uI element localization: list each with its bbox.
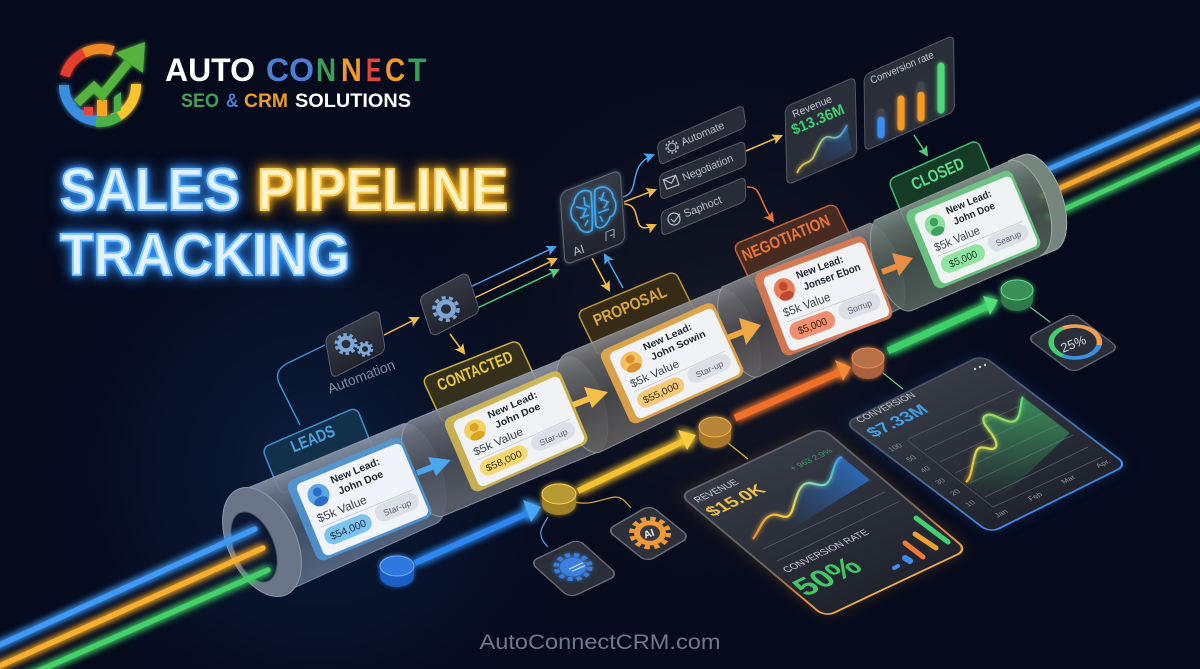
- arrow: negotiation pill to revenue: [746, 136, 781, 151]
- icon: check: [668, 213, 680, 225]
- pill: negotiation: [659, 141, 746, 200]
- value: $5k Value: [781, 290, 833, 320]
- grid lines: [907, 390, 1102, 507]
- name: Jonser Ebon: [802, 262, 862, 293]
- node: yellow: [542, 484, 576, 515]
- pill: amount: $5,000: [948, 249, 980, 271]
- flow bar: blue: [415, 500, 541, 563]
- pill: tag: Searup: [994, 229, 1023, 248]
- arrow: gear to contacted: [450, 334, 464, 353]
- logo: [64, 42, 427, 122]
- pill: amount: $58,000: [485, 449, 524, 474]
- name: New Lead:: [795, 254, 845, 282]
- logo wordmark: E: [366, 52, 381, 88]
- arrow: conversion rate to closed: [914, 135, 927, 155]
- revenue chart: [753, 457, 900, 561]
- name: John Doe: [494, 402, 543, 431]
- label: revenue: REVENUE: [691, 478, 742, 505]
- tube opening: [207, 475, 317, 609]
- label: conversion rate: Conversion rate: [868, 49, 936, 87]
- label: conversion rate: CONVERSION RATE: [780, 528, 872, 575]
- name: John Doe: [952, 200, 997, 228]
- label: revenue: Revenue: [790, 93, 834, 121]
- stage label: leads: LEADS: [288, 421, 338, 456]
- label: saphoct: Saphoct: [682, 194, 724, 220]
- label: negotiation: Negotiation: [681, 153, 735, 184]
- arrow: contacted to proposal: [573, 387, 608, 408]
- conversion chart: [966, 397, 1070, 507]
- label: 25%: 25%: [1058, 332, 1089, 356]
- pill: tag: [685, 351, 734, 386]
- node: green: [1001, 280, 1033, 311]
- arrows: AI to action pills: [623, 155, 655, 228]
- logo wordmark: N: [316, 53, 336, 88]
- pipeline tube: leads: [207, 423, 446, 609]
- avatar: [461, 416, 490, 444]
- mini card: revenue: [785, 77, 857, 185]
- axis labels: Mar: [1059, 474, 1078, 485]
- tube end bevel: [1008, 154, 1067, 256]
- value: conversion: $7.33M: [862, 401, 933, 441]
- value: revenue: $13.36M: [789, 101, 847, 139]
- pipeline tube: proposal: [556, 289, 760, 453]
- title: SALES: [60, 157, 240, 223]
- axis labels: Jan: [992, 508, 1010, 519]
- value: revenue: $15.0K: [701, 481, 770, 520]
- avatar: [304, 481, 333, 510]
- tile: AI brain: [560, 170, 625, 265]
- pipeline tube: contacted: [401, 357, 608, 516]
- name: New Lead:: [944, 188, 993, 217]
- tile: AI gear: [607, 505, 690, 562]
- title: PIPELINE: [257, 157, 508, 223]
- pill: tag: [836, 290, 883, 322]
- arrows: AI and proposal: [592, 255, 623, 290]
- stage label: negotiation: NEGOTIATION: [739, 212, 833, 265]
- icon: burst gear: [556, 555, 590, 579]
- axis labels: 100: [886, 442, 904, 453]
- value: $5k Value: [315, 493, 369, 525]
- axis labels: 20: [948, 488, 962, 497]
- axis labels: Apr.: [1093, 458, 1113, 469]
- axis labels: 40: [918, 465, 932, 474]
- arrow: negotiation to closed: [882, 253, 913, 276]
- stage label: negotiation: [733, 203, 856, 290]
- label: conversion: CONVERSION: [854, 391, 919, 425]
- node: amber: [699, 417, 731, 448]
- title: [60, 157, 508, 288]
- label: change: + 963 2.9%: [787, 447, 835, 472]
- tile: automation: [325, 310, 397, 396]
- pill: amount: [634, 375, 687, 410]
- logo tagline: [181, 90, 411, 112]
- pill: amount: [477, 443, 530, 478]
- arrow: automation to gear: [384, 318, 418, 335]
- name: John Doe: [337, 469, 385, 497]
- logo tagline: &: [226, 90, 238, 111]
- label: automate: Automate: [679, 120, 726, 149]
- value: $5k Value: [629, 358, 681, 391]
- icon: brain: [571, 187, 616, 232]
- flow bar: yellow: [578, 430, 696, 491]
- dashboard: conversion: [845, 355, 1127, 533]
- label: AI: AI: [571, 242, 586, 259]
- logo wordmark: N: [341, 53, 362, 88]
- donut chart: [1051, 326, 1099, 358]
- stage label: closed: CLOSED: [908, 154, 967, 194]
- pill: tag: Star-up: [538, 427, 569, 448]
- pill: amount: $5,000: [797, 316, 829, 337]
- name: [329, 457, 387, 499]
- name: New Lead:: [329, 457, 382, 487]
- pill: automate: [657, 105, 746, 165]
- arrow: proposal to negotiation: [727, 318, 761, 345]
- icon: AI gear: [632, 519, 668, 547]
- lower flow connectors: [541, 307, 1050, 547]
- lead card: negotiation: [753, 234, 895, 357]
- lead card: leads: [285, 435, 434, 563]
- name: [486, 390, 544, 432]
- stage label: contacted: [422, 340, 539, 424]
- incoming data lines right: [1035, 101, 1200, 218]
- axis labels: 30: [933, 477, 947, 486]
- name: [795, 250, 862, 294]
- pipeline tube: closed: [870, 154, 1067, 311]
- tube hole: [222, 505, 286, 589]
- incoming data lines left: [0, 529, 268, 669]
- tile: blue gear burst: [530, 539, 618, 598]
- name: New Lead:: [642, 322, 694, 353]
- logo wordmark: AUTO: [165, 52, 255, 88]
- menu dots: [974, 364, 986, 370]
- name: New Lead:: [486, 390, 539, 421]
- stage label: closed: [888, 140, 996, 226]
- stage label: proposal: [577, 271, 697, 357]
- name: [642, 318, 708, 364]
- mini line chart: [797, 125, 852, 173]
- name: [944, 188, 998, 229]
- mini bars: [881, 66, 941, 135]
- logo wordmark: T: [408, 52, 427, 88]
- avatar: [617, 348, 646, 376]
- tile: gear: [419, 272, 480, 337]
- value: $5k Value: [933, 225, 982, 255]
- footer url: AutoConnectCRM.com: [480, 631, 720, 654]
- pill: tag: [372, 490, 422, 524]
- label: automation: Automation: [325, 356, 397, 396]
- pill: amount: $55,000: [642, 381, 681, 406]
- logo tagline: CRM: [244, 91, 288, 112]
- flow bar: green: [888, 296, 998, 351]
- logo tagline: SEO: [181, 91, 219, 112]
- icon: gears: [336, 334, 372, 356]
- axis labels: Feb: [1026, 491, 1045, 502]
- mini card: conversion rate: [864, 35, 955, 151]
- stage label: proposal: PROPOSAL: [591, 283, 669, 330]
- pill: tag: Star-up: [694, 359, 725, 380]
- lead card: proposal: [598, 301, 746, 426]
- pill: saphoct: [661, 177, 746, 236]
- avatar: [922, 211, 949, 239]
- stage label: contacted: CONTACTED: [435, 348, 516, 395]
- stage label: leads: [262, 407, 375, 494]
- axis labels: 10: [963, 499, 977, 508]
- logo wordmark: [165, 52, 427, 88]
- node: orange: [852, 348, 884, 379]
- value: 50%: 50%: [784, 551, 869, 601]
- value: $5k Value: [472, 426, 525, 459]
- logo tagline: SOLUTIONS: [295, 91, 411, 112]
- connector: leads to automation: [278, 345, 325, 425]
- tile: donut: [1027, 313, 1119, 373]
- logo wordmark: CO: [266, 52, 314, 88]
- avatar: [771, 275, 798, 304]
- arrow: leads to contacted: [417, 457, 451, 476]
- title: TRACKING: [60, 222, 350, 288]
- name: John Sowin: [649, 329, 708, 363]
- bars: [894, 518, 948, 568]
- pill: amount: $54,000: [329, 518, 368, 543]
- icon: nodes: [606, 229, 614, 241]
- pill: tag: Star-up: [382, 498, 413, 518]
- arrow: saphoct pill to negotiation: [747, 187, 773, 221]
- lead card: contacted: [442, 369, 590, 494]
- icon: puzzle gear: [666, 141, 678, 153]
- lead card: closed: [904, 169, 1043, 290]
- arrows: gear to AI: [468, 247, 558, 311]
- logo wordmark: C: [385, 53, 405, 88]
- pill: tag: Sorrup: [846, 298, 874, 316]
- pill: amount: [787, 309, 838, 342]
- pipeline tube: negotiation: [718, 223, 905, 377]
- axis labels: [886, 442, 1113, 519]
- icon: envelope: [663, 175, 679, 189]
- icon: gear: [434, 298, 458, 320]
- pill: tag: [529, 419, 578, 454]
- dashboard: revenue: [680, 428, 967, 617]
- axis labels: 50: [904, 454, 918, 463]
- pill: amount: [321, 512, 374, 547]
- flow bar: orange: [735, 360, 851, 418]
- logo icon: [64, 42, 145, 122]
- label: AI: AI: [642, 527, 656, 542]
- node: blue: [380, 556, 414, 587]
